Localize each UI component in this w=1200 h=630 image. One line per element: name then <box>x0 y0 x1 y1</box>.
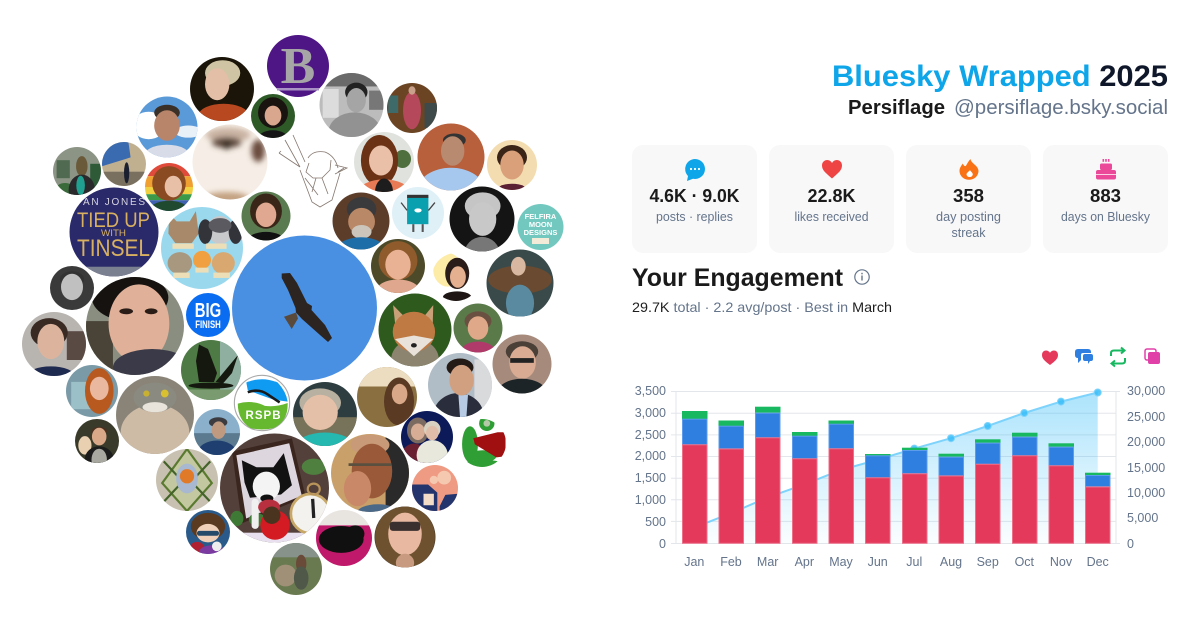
month labels: Aug <box>940 555 962 569</box>
cumulative points <box>911 389 1101 452</box>
avatar: smiling woman among plants <box>454 304 502 352</box>
avatar: red kite against blue sky <box>232 236 377 380</box>
avatar: book cover Tied Up With Tinsel: WITH <box>101 228 126 239</box>
red like bars <box>682 438 1110 543</box>
icon: cake <box>1096 159 1116 180</box>
avatar: Felfira Moon Designs logo: DESIGNS <box>524 228 557 237</box>
avatar: book cover Tied Up With Tinsel: TINSEL <box>77 235 150 262</box>
blue reply bars <box>682 413 1110 486</box>
avatar: two older women <box>401 411 453 463</box>
avatar: woman with red-gold hair <box>371 239 425 293</box>
left axis labels: 1,000 <box>635 493 666 507</box>
avatar cluster <box>22 35 564 595</box>
stat card: day posting streak <box>906 145 1031 253</box>
avatar: crow in flight <box>181 340 241 400</box>
avatar: man resting chin on hand <box>331 434 409 512</box>
stat card: posts and replies: posts · replies <box>656 210 733 224</box>
stat card: day posting streak: streak <box>952 226 986 240</box>
avatar: black and white cat with clock <box>220 434 330 544</box>
avatar: book cover Tied Up With Tinsel: AN JONES <box>83 197 145 208</box>
month labels: Jun <box>868 555 888 569</box>
month labels: Sep <box>977 555 999 569</box>
stat card: likes received: 22.8K <box>808 186 856 206</box>
avatar: Big Finish logo: FINISH <box>195 319 221 331</box>
avatar: figure in a town street <box>102 142 146 186</box>
right axis labels: 20,000 <box>1127 435 1165 449</box>
avatar: dark-haired woman <box>251 94 295 138</box>
avatar: Felfira Moon Designs logo <box>518 204 564 250</box>
avatar: smiling man <box>487 140 537 190</box>
avatar: man against brick wall <box>418 124 484 190</box>
heading: Your Engagement: Your Engagement <box>632 264 844 292</box>
month labels: Dec <box>1087 555 1109 569</box>
avatar: purple B logo: B <box>281 38 315 95</box>
icon: quotes squares <box>1145 349 1160 364</box>
cumulative line <box>694 392 1098 528</box>
avatar: cartoon woman with glasses <box>186 510 230 558</box>
avatar: man against blue sky and clouds <box>132 96 202 170</box>
avatar: burrowing owl chick <box>116 376 194 461</box>
icon: info <box>855 270 869 284</box>
left axis labels: 3,000 <box>635 406 666 420</box>
avatar: blonde woman in black and white <box>450 186 514 252</box>
month labels: May <box>829 555 854 569</box>
cumulative area <box>694 392 1098 544</box>
stat card: days on Bluesky: 883 <box>1090 186 1121 206</box>
left axis labels: 3,500 <box>635 384 666 398</box>
avatar: woman with rainbow background and book <box>145 163 193 214</box>
left axis labels <box>635 384 666 551</box>
avatar: man holding vase <box>75 419 119 463</box>
avatar: blurred close-up eye <box>192 124 268 203</box>
month labels: Jan <box>684 555 704 569</box>
avatar: man in cap from behind <box>194 409 240 455</box>
stat card: likes received: likes received <box>794 210 869 224</box>
left axis labels: 1,500 <box>635 471 666 485</box>
avatar: man in black and white <box>320 73 384 137</box>
stat card: days on Bluesky: days on Bluesky <box>1061 210 1151 224</box>
icon: likes heart <box>1042 350 1058 365</box>
month labels: Apr <box>795 555 814 569</box>
avatar: woman with glasses and curly hair <box>242 192 290 249</box>
right axis labels <box>1127 384 1165 551</box>
left axis labels: 2,500 <box>635 428 666 442</box>
month labels: Feb <box>720 555 742 569</box>
avatar: green bookworm with red book <box>462 419 506 467</box>
month labels: Mar <box>757 555 778 569</box>
chart gridlines <box>671 392 1120 544</box>
left axis labels: 0 <box>659 537 666 551</box>
month labels: Jul <box>906 555 922 569</box>
green repost bars <box>682 407 1110 475</box>
avatar: black cat on pink blanket <box>316 510 372 566</box>
avatar: Felfira Moon Designs logo: FELFIRA <box>525 212 557 221</box>
icon: flame <box>960 159 978 180</box>
icon: heart <box>822 160 842 178</box>
avatar: embroidered robin <box>156 449 218 511</box>
avatar: man with glasses <box>492 334 552 394</box>
avatar: woman with curly hair and glasses <box>374 506 436 572</box>
avatar: book cover Tied Up With Tinsel <box>70 188 158 278</box>
legend icons <box>1042 348 1160 366</box>
avatar: fox <box>378 294 452 366</box>
avatar: illustrated cats and dog <box>161 207 243 289</box>
right axis labels: 25,000 <box>1127 410 1165 424</box>
right axis labels: 30,000 <box>1127 384 1165 398</box>
icon: speech bubble <box>685 159 705 181</box>
avatar: fantasy woman with flowing hair <box>486 250 554 322</box>
month labels: Nov <box>1050 555 1073 569</box>
left axis labels: 500 <box>645 515 666 529</box>
avatar: woman with dog outdoors <box>270 543 322 595</box>
avatar: blonde woman on dark background <box>190 57 254 127</box>
month labels: Oct <box>1015 555 1035 569</box>
avatar: sketched figure <box>279 135 347 207</box>
avatar: man in beanie <box>332 192 390 250</box>
avatar: woman with fringe <box>22 312 86 376</box>
avatar: purple B logo <box>267 35 329 97</box>
right axis labels: 0 <box>1127 537 1134 551</box>
avatar: Felfira Moon Designs logo: MOON <box>529 220 552 229</box>
icon: replies bubbles <box>1075 349 1093 364</box>
avatar: pink and blue house illustration <box>412 465 458 511</box>
avatar: RSPB logo <box>234 374 290 432</box>
avatar: Big Finish logo: BIG <box>195 300 221 322</box>
header: display name: Persiflage <box>848 97 945 119</box>
avatar: woman in garden <box>53 147 101 206</box>
header: handle: @persiflage.bsky.social <box>954 97 1168 119</box>
avatar: red-haired woman holding book <box>66 365 118 417</box>
avatar: happy teal book <box>392 187 444 239</box>
chart: monthly engagement stacked bars with cumulative line <box>635 384 1165 569</box>
avatar: grey-haired woman with glasses <box>293 382 357 446</box>
month labels <box>684 555 1109 569</box>
stat card: day posting streak: day posting <box>936 210 1001 224</box>
avatar: man in suit <box>428 353 492 417</box>
stat card: posts and replies <box>632 145 757 253</box>
right axis labels: 15,000 <box>1127 461 1165 475</box>
avatar: Big Finish logo <box>186 293 230 337</box>
avatar: woman with dark hair, large selfie <box>86 277 184 375</box>
icon: repost arrows <box>1111 348 1125 366</box>
right axis labels: 5,000 <box>1127 511 1158 525</box>
stat card: days on Bluesky <box>1043 145 1168 253</box>
avatar: book cover Tied Up With Tinsel: TIED UP <box>77 209 150 232</box>
avatar: auburn-haired woman in orange jacket <box>354 132 414 192</box>
right axis labels: 10,000 <box>1127 486 1165 500</box>
avatar: RSPB logo: RSPB <box>246 410 280 422</box>
stat card: posts and replies: 4.6K · 9.0K <box>650 186 740 206</box>
avatar: woman in floral dress <box>387 83 437 133</box>
avatar: woman in sunset field <box>357 367 417 427</box>
stat card: likes received <box>769 145 894 253</box>
left axis labels: 2,000 <box>635 449 666 463</box>
engagement summary: 29.7K total · 2.2 avg/post · Best in March <box>632 299 892 315</box>
stat card: day posting streak: 358 <box>953 186 984 206</box>
avatar: illustrated woman with yellow glow <box>433 254 471 301</box>
header: title: Bluesky Wrapped 2025 <box>832 60 1168 93</box>
avatar: smiling woman in greyscale <box>50 266 94 310</box>
